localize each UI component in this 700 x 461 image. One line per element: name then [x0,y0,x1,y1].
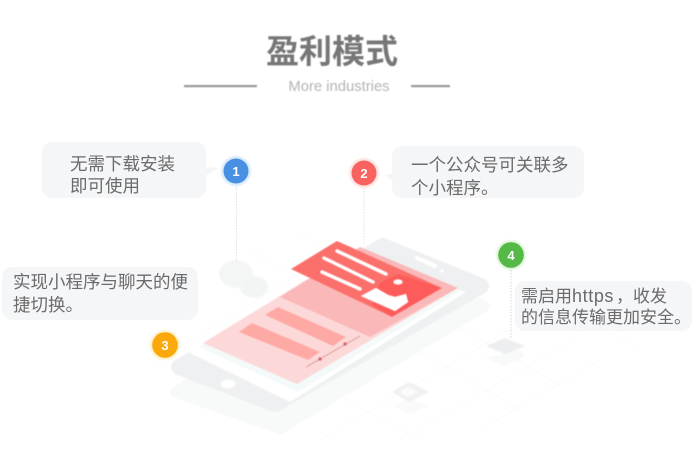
icon: picture tile [392,382,429,414]
dotted connector 2 [363,188,365,245]
phone shadow [176,268,484,428]
phone home button [220,380,236,388]
dotted connector 4 [510,270,512,338]
phone body [179,246,481,404]
badge 3: 3 [161,338,169,353]
badge 2 [349,158,379,188]
callout 2: 一个公众号可关联多 [411,155,568,175]
illustration: phone [176,241,484,428]
callout 3 [2,267,198,320]
badge 4 [496,240,526,270]
subtitle with rules: More industries [288,79,390,95]
card text lines [322,251,386,289]
badge 2: 2 [360,166,368,181]
badge 1: 1 [232,164,240,179]
callout 2: 个小程序。 [411,178,498,198]
phone speaker [417,258,444,273]
phone screen [188,247,466,402]
callout 1: 无需下载安装 [70,154,175,174]
icon: small tile under badge 4 [485,338,525,366]
badge 3 [150,330,180,360]
callout 1: 即可使用 [70,176,140,196]
icon: wechat [219,260,268,298]
screen content: bar 2 [239,323,320,360]
screen content: thin line with dots [306,336,360,367]
dotted connector 1 [236,186,238,262]
callout 2 [384,146,584,198]
screen content: bar 1 [265,307,346,346]
card image icon [361,280,408,311]
title: 盈利模式 [266,33,398,70]
callout 3: 实现小程序与聊天的便 [13,272,188,292]
screen content: light pink [203,247,458,384]
callout 4: 的信息传输更加安全。 [521,308,691,327]
screen content: header block [280,247,458,337]
badge 1 [221,156,251,186]
red card [291,241,442,317]
callout 3: 捷切换。 [13,295,83,315]
badge 4: 4 [507,248,515,263]
callout 1 [42,142,219,198]
callout 4: 需启用https，收发 [521,286,667,306]
callout 4 [515,281,692,331]
